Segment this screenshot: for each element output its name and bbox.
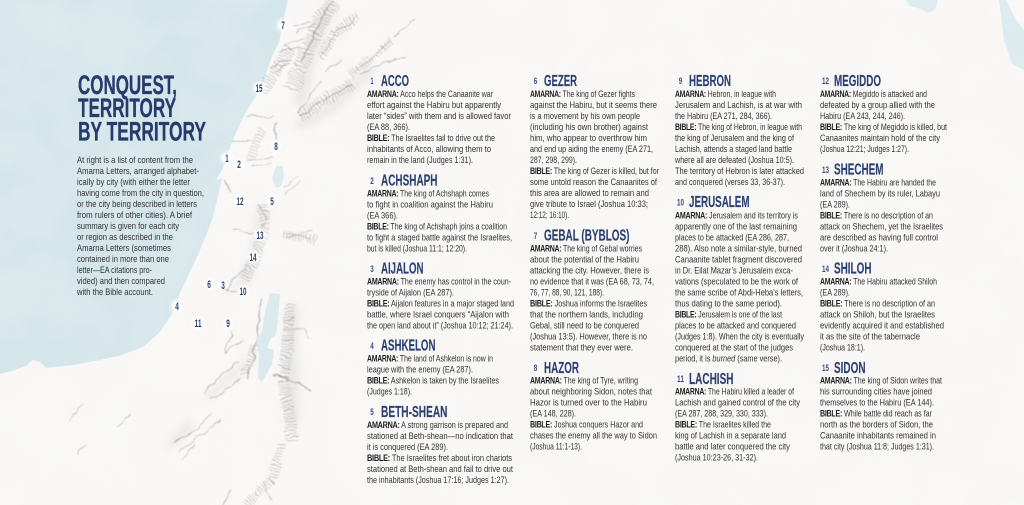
intro text: Amarna Letters (sometimes	[77, 243, 171, 253]
map markers: 5	[270, 196, 274, 208]
entry: Shiloh: (Joshua 18:1).	[820, 343, 865, 353]
entry: Acco: inhabitants of Acco, allowing them to	[367, 144, 491, 154]
intro text: from rulers of other cities). A brief	[77, 210, 192, 220]
title	[78, 70, 206, 146]
map markers: 4	[175, 301, 179, 313]
entry: Beth-Shean	[367, 404, 513, 485]
entry: Gezer: 287, 298, 299).	[530, 155, 577, 165]
entry: Gebal (Byblos): no evidence that it was (EA 68, 73, 74,	[530, 277, 654, 287]
entry: Gezer: and end up aiding the enemy (EA 271,	[530, 144, 653, 154]
entry: Lachish: king of Lachish in a separate land	[675, 431, 786, 441]
intro text: ically by city (with either the letter	[77, 177, 190, 187]
entry: Gebal (Byblos): about the potential of the Habiru	[530, 255, 639, 265]
entry: Ashkelon: league with the enemy (EA 287).	[367, 365, 473, 375]
intro text: At right is a list of content from the	[77, 155, 193, 165]
entry: Gezer: is a movement by his own people	[530, 111, 640, 121]
entry: Sidon: Canaanite inhabitants remained in	[820, 431, 936, 441]
entry: Hebron: HEBRON	[689, 73, 731, 90]
entry: Jerusalem: the same scribe of Abdi-Heba’s letters,	[675, 288, 803, 298]
intro text: having come from the city in question,	[77, 188, 204, 198]
entry: Gezer: 12:12; 16:10).	[530, 210, 569, 220]
entry: Gebal (Byblos): BIBLE: Joshua informs the Israelites	[530, 299, 647, 309]
entry: Shiloh: 14	[822, 264, 829, 275]
entry: Jerusalem: period, it is burned (same verse).	[675, 354, 782, 364]
entry: Aijalon	[367, 260, 514, 331]
terrain ridges	[70, 2, 415, 505]
entry: Jerusalem: places to be attacked and conquered	[675, 321, 796, 331]
entry: Gezer: AMARNA: The king of Gezer fights	[530, 89, 635, 99]
terrain hachures	[245, 2, 392, 505]
entry: Ashkelon: BIBLE: Ashkelon is taken by the Israelites	[367, 376, 499, 386]
entry: Aijalon: tryside of Aijalon (EA 287).	[367, 288, 454, 298]
entry: Aijalon: AMARNA: The enemy has control in the coun-	[367, 277, 511, 287]
entry: Achshaph: but is killed (Joshua 11:1; 12:20).	[367, 244, 467, 254]
entry: Megiddo: defeated by a group allied with the	[820, 100, 935, 110]
entry: Acco: effort against the Habiru but apparently	[367, 100, 501, 110]
entry: Jerusalem: (Judges 1:8). When the city is eventually	[675, 332, 804, 342]
entry: Hebron: where all are defeated (Joshua 10:5).	[674, 155, 794, 165]
entry: Shechem: over it (Joshua 24:1).	[820, 243, 888, 253]
entry: Gebal (Byblos): statement that they ever were.	[530, 343, 633, 353]
entry: Achshaph: 2	[370, 176, 374, 187]
entry: Gebal (Byblos): 76, 77, 88, 90, 121, 188).	[530, 288, 604, 298]
entry: Beth-Shean: 5	[370, 407, 374, 418]
entry: Beth-Shean: BETH-SHEAN	[381, 404, 448, 421]
entry: Beth-Shean: BIBLE: The Israelites fret about iron chariots	[367, 453, 512, 463]
entry: Megiddo: BIBLE: The king of Megiddo is killed, but	[820, 122, 947, 132]
entry: Hebron: 9	[679, 76, 682, 87]
map markers: 11	[194, 318, 202, 330]
entry: Megiddo: 12	[822, 76, 829, 87]
map markers: 14	[250, 252, 257, 264]
entry: Hazor	[530, 360, 657, 452]
map markers: 3	[221, 280, 225, 292]
entry: Lachish: battle and later conquered the city	[675, 442, 790, 452]
entry: Hebron: and conquered (verses 33, 36-37).	[675, 177, 785, 187]
entry: Gezer: BIBLE: The king of Gezer is killed, but for	[530, 166, 659, 176]
entry: Acco: (EA 88, 366).	[367, 122, 410, 132]
entry: Shiloh: AMARNA: The Habiru attacked Shiloh	[820, 277, 937, 287]
entry: Lachish: (Joshua 10:23-26, 31-32).	[675, 453, 758, 463]
entry: Megiddo: (Joshua 12:21; Judges 1:27).	[820, 144, 909, 154]
entry: Jerusalem: thus dating to the same period).	[675, 299, 782, 309]
entry: Gezer	[530, 73, 659, 220]
entry: Gezer: (including his own brother) against	[530, 122, 648, 132]
entry: Hazor: (Joshua 11:1-13).	[530, 442, 582, 452]
entry: Gezer: GEZER	[544, 73, 577, 90]
entry: Shechem: (EA 289).	[820, 199, 850, 209]
entry: Hebron: Jerusalem and Lachish, is at war with	[675, 100, 802, 110]
entry: Megiddo: Canaanites maintain hold of the city	[820, 133, 940, 143]
entry: Megiddo: AMARNA: Megiddo is attacked and	[820, 89, 927, 99]
entry: Ashkelon	[367, 338, 499, 397]
title: TERRITORY	[78, 93, 176, 123]
intro text: or the city being described in letters	[77, 199, 197, 209]
entry: Achshaph: (EA 366).	[367, 210, 398, 220]
entry: Hazor: (EA 148, 228).	[530, 409, 576, 419]
entry: Hazor: Hazor is turned over to the Habiru	[530, 398, 647, 408]
entry: Lachish: BIBLE: The Israelites killed the	[675, 420, 771, 430]
entry: Sidon: themselves to the Habiru (EA 144).	[820, 398, 934, 408]
entry: Jerusalem: JERUSALEM	[689, 194, 750, 211]
entry: Aijalon: BIBLE: Aijalon features in a major staged land	[367, 299, 514, 309]
entry: Shechem: BIBLE: There is no description of an	[820, 210, 933, 220]
entry: Acco: AMARNA: Acco helps the Canaanite war	[367, 89, 493, 99]
entry: Acco: 1	[370, 76, 374, 87]
entry: Hebron: BIBLE: The king of Hebron, in league with	[675, 122, 802, 132]
entry: Hebron: The territory of Hebron is later attacked	[675, 166, 804, 176]
entry: Shiloh	[820, 260, 944, 353]
entry: Beth-Shean: stationed at Beth-shean and fail to drive out	[367, 464, 513, 474]
entry: Sidon: SIDON	[834, 360, 866, 377]
entry: Jerusalem: 10	[677, 198, 684, 208]
entry: Lachish: Lachish and gained control of the city	[675, 398, 800, 408]
entry: Beth-Shean: AMARNA: A strong garrison is prepared and	[367, 420, 508, 430]
terrain soft shading	[170, 8, 370, 445]
entry: Hebron: Lachish, attends a staged land battle	[675, 144, 792, 154]
entry: Shechem: 13	[822, 165, 829, 176]
entry: Aijalon: the open land about it” (Joshua 10:12; 21:24).	[367, 321, 513, 331]
entry: Aijalon: AIJALON	[381, 260, 424, 278]
column 3	[674, 73, 804, 463]
entry: Shiloh: SHILOH	[834, 260, 872, 278]
title: BY TERRITORY	[78, 116, 206, 146]
entry: Gebal (Byblos): GEBAL (BYBLOS)	[544, 228, 630, 244]
column 1	[367, 73, 514, 485]
intro text	[76, 155, 204, 297]
entry: Lachish: 11	[677, 374, 684, 385]
map markers: 15	[256, 83, 262, 95]
entry: Shechem: AMARNA: The Habiru are handed the	[820, 177, 936, 187]
entry: Acco: ACCO	[381, 73, 409, 90]
entry: Gebal (Byblos): attacking the city. However, there is	[530, 266, 649, 276]
lake: Dead Sea	[257, 293, 280, 382]
column 2	[530, 73, 659, 452]
entry: Hazor: BIBLE: Joshua conquers Hazor and	[530, 420, 643, 430]
entry: Jerusalem: 288). Also note a similar-style, burned	[675, 243, 802, 253]
map markers: 13	[256, 230, 264, 242]
entry: Gebal (Byblos): (Joshua 13:5). However, there is no	[530, 332, 647, 342]
entry: Achshaph	[367, 172, 512, 254]
entry: Hebron	[674, 73, 804, 187]
map markers: 7	[281, 20, 285, 32]
entry: Hazor: about neighboring Sidon, notes that	[530, 387, 652, 397]
entry: Gezer: against the Habiru, but it seems there	[530, 100, 657, 110]
entry: Achshaph: BIBLE: The king of Achshaph joins a coalition	[367, 222, 507, 232]
intro text: with the Bible account.	[76, 287, 153, 297]
entry: Gebal (Byblos): that the northern lands, including	[530, 310, 643, 320]
entry: Aijalon: 3	[370, 264, 374, 275]
entry: Hebron: AMARNA: Hebron, in league with	[675, 89, 776, 99]
entry: Jerusalem: BIBLE: Jerusalem is one of the last	[675, 310, 782, 320]
entry: Sidon	[820, 360, 942, 452]
entry: Sidon: that city (Joshua 11:8; Judges 1:31).	[820, 442, 934, 452]
entry: Acco: BIBLE: The Israelites fail to drive out the	[367, 133, 495, 143]
entry: Gebal (Byblos): 7	[534, 231, 537, 242]
entry: Beth-Shean: stationed at Beth-shean—no indication that	[367, 431, 513, 441]
entry: Shiloh: BIBLE: There is no description of an	[820, 299, 935, 309]
entry: Lachish: LACHISH	[689, 371, 734, 388]
entry: Acco: remain in the land (Judges 1:31).	[367, 155, 473, 165]
entry: Beth-Shean: it is conquered (EA 289).	[367, 442, 448, 452]
map markers	[171, 19, 289, 330]
entry: Megiddo: MEGIDDO	[834, 73, 881, 90]
entry: Lachish: AMARNA: The Habiru killed a leader of	[675, 387, 794, 397]
entry: Ashkelon: (Judges 1:18).	[367, 387, 412, 397]
entry: Sidon: north as the borders of Sidon, the	[820, 420, 933, 430]
entry: Ashkelon: ASHKELON	[381, 338, 436, 354]
entry: Gezer: give tribute to Israel (Joshua 10:33;	[530, 199, 648, 209]
entry: Megiddo	[820, 73, 947, 154]
map markers: 1	[225, 153, 229, 165]
entry: Jerusalem: Canaanite tablet fragment discovered	[675, 254, 802, 264]
entry: Gebal (Byblos)	[530, 228, 654, 353]
title: CONQUEST,	[78, 70, 177, 100]
entry: Ashkelon: 4	[370, 341, 374, 352]
entry: Acco	[367, 73, 511, 165]
entry: Gezer: him, who appear to overthrow him	[530, 133, 647, 143]
entry: Jerusalem	[675, 194, 804, 364]
map markers: 9	[226, 318, 230, 330]
lake: Sea of Galilee	[272, 166, 284, 188]
entry: Megiddo: Habiru (EA 243, 244, 246).	[820, 111, 905, 121]
entry: Achshaph: ACHSHAPH	[381, 172, 438, 190]
lakes: north-east corner	[906, 0, 1024, 70]
entry: Hazor: HAZOR	[544, 360, 579, 377]
entry: Lachish	[675, 371, 800, 463]
entry: Jerusalem: places to be attacked (EA 286, 287,	[675, 232, 789, 242]
entry: Gezer: this area are allowed to remain and	[530, 188, 649, 198]
entry: Shiloh: evidently acquired it and established	[820, 321, 944, 331]
map markers: 10	[240, 286, 246, 298]
entry: Lachish: (EA 287, 288, 329, 330, 333).	[675, 409, 768, 419]
entry: Achshaph: to fight in coalition against the Habiru	[367, 200, 493, 210]
entry: Acco: later “sides” with them and is allowed favor	[367, 111, 511, 121]
map markers: 2	[237, 159, 241, 171]
entry: Sidon: 15	[822, 363, 829, 374]
map markers: 12	[236, 196, 244, 208]
entry: Jerusalem: in Dr. Eilat Mazar’s Jerusalem exca-	[675, 265, 793, 275]
map markers: 8	[274, 141, 278, 153]
entry: Shechem: SHECHEM	[834, 162, 884, 178]
entry: Shechem: are described as having full control	[820, 232, 938, 242]
entry: Jerusalem: conquered at the start of the judges	[675, 343, 793, 353]
entry: Achshaph: AMARNA: The king of Achshaph comes	[367, 188, 489, 198]
intro text: or region as described in the	[77, 232, 173, 242]
entry: Gebal (Byblos): Gebal, still need to be conquered	[530, 321, 639, 331]
entry: Shiloh: (EA 289).	[820, 288, 850, 298]
intro text: Amarna Letters, arranged alphabet-	[77, 166, 199, 176]
intro text: vided) and then compared	[77, 276, 165, 286]
entry: Gebal (Byblos): AMARNA: The king of Gebal worries	[530, 244, 642, 254]
entry: Gezer: 6	[534, 76, 537, 87]
entry: Sidon: his surrounding cities have joined	[820, 387, 932, 397]
entry: Sidon: BIBLE: While battle did reach as far	[820, 409, 932, 419]
entry: Hazor: 8	[534, 363, 537, 374]
column 4	[820, 73, 947, 452]
entry: Shiloh: it as the site of the tabernacle	[820, 332, 920, 342]
entry: Hebron: the king of Jerusalem and the king of	[675, 133, 794, 143]
entry: Hazor: AMARNA: The king of Tyre, writing	[530, 376, 638, 386]
intro text: letter—EA citations pro-	[77, 265, 152, 275]
entry: Jerusalem: apparently one of the last remaining	[675, 221, 797, 231]
entry: Hazor: chases the enemy all the way to Sidon	[530, 431, 657, 441]
entry: Hebron: the Habiru (EA 271, 284, 366).	[675, 111, 772, 121]
entry: Jerusalem: vations (speculated to be the work of	[675, 277, 798, 287]
entry: Beth-Shean: the inhabitants (Joshua 17:16; Judges 1:27).	[367, 475, 509, 485]
sea: Mediterranean	[0, 0, 288, 374]
entry: Shechem: land of Shechem by its ruler, Labayu	[820, 188, 940, 198]
entry: Gezer: some untold reason the Canaanites of	[530, 177, 657, 187]
map markers: 6	[207, 279, 211, 291]
entry: Shechem: attack on Shechem, yet the Israelites	[820, 221, 943, 231]
entry: Achshaph: to fight a staged battle against the Israelites,	[367, 232, 512, 242]
entry: Jerusalem: AMARNA: Jerusalem and its territory is	[675, 210, 798, 220]
intro text: contained in more than one	[77, 254, 169, 264]
entry: Ashkelon: AMARNA: The land of Ashkelon is now in	[367, 354, 493, 364]
entry: Shechem	[820, 162, 943, 253]
entry: Shiloh: attack on Shiloh, but the Israelites	[820, 310, 935, 320]
intro text: summary is given for each city	[77, 221, 179, 231]
entry: Sidon: AMARNA: The king of Sidon writes that	[820, 376, 942, 386]
entry: Aijalon: battle, where Israel conquers “Aijalon with	[367, 310, 509, 320]
